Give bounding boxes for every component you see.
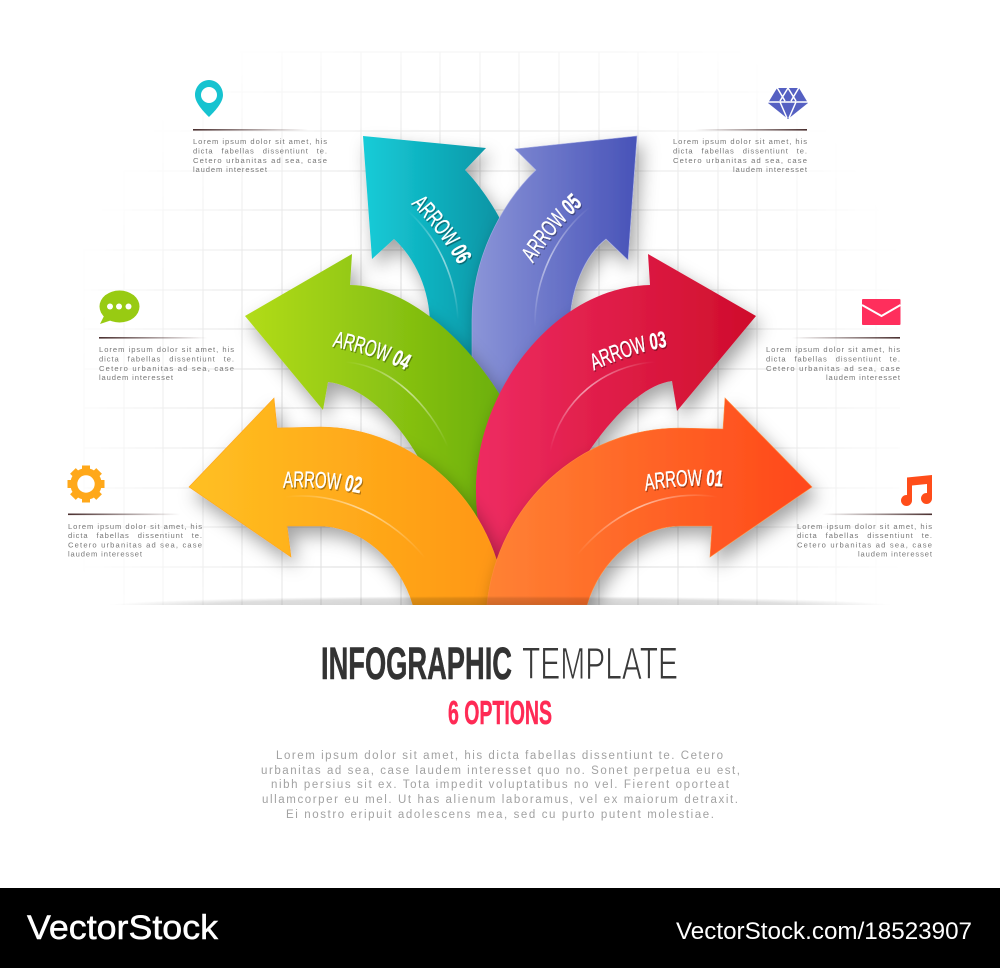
body text: nibh persius sit ex. Tota impedit voluptatibus no vel. Fierent oporteat [271, 779, 730, 791]
text block: bottom left: Lorem ipsum dolor sit amet, his [68, 522, 202, 531]
arrows fan [105, 136, 895, 616]
text block: bottom right: Cetero urbanitas ad sea, case [797, 540, 932, 550]
label: arrow 04: ARROW 04 [332, 332, 413, 371]
icon: diamond [766, 87, 810, 119]
body text: urbanitas ad sea, case laudem interesset quo no. Sonet perpetua eu est, [261, 765, 740, 777]
text block: top right: dicta fabellas dissentiunt te. [673, 146, 807, 156]
text block: top right [673, 129, 808, 174]
text block: middle left: Cetero urbanitas ad sea, case [99, 364, 234, 373]
text block: bottom left: laudem interesset [68, 550, 143, 558]
title: TEMPLATE [522, 638, 678, 689]
text block: bottom right: dicta fabellas dissentiunt te. [797, 531, 932, 540]
arrow 05 [472, 136, 637, 400]
icon: speech bubble [100, 290, 140, 324]
text block: middle right [766, 337, 901, 382]
arrow 03 [476, 254, 756, 600]
text block: top left: dicta fabellas dissentiunt te. [193, 146, 327, 156]
icon: envelope [862, 299, 900, 325]
text block: middle left: Lorem ipsum dolor sit amet, his [99, 345, 234, 354]
body text: ullamcorper eu mel. Ut has alienum laboramus, vel ex maiorum detraxit. [262, 794, 738, 806]
text block: bottom right: Lorem ipsum dolor sit amet, his [797, 522, 932, 531]
arrow 04 [244, 254, 504, 518]
text block: bottom right: laudem interesset [858, 550, 933, 558]
icon: gear [68, 466, 104, 502]
text block: top right: Lorem ipsum dolor sit amet, his [673, 137, 807, 146]
text block: middle right: Lorem ipsum dolor sit amet, his [766, 345, 900, 354]
text block: bottom left: Cetero urbanitas ad sea, case [68, 540, 202, 550]
text block: middle right: laudem interesset [826, 373, 901, 382]
text block: top left: laudem interesset [193, 165, 268, 174]
text block: bottom left [68, 514, 202, 558]
title: INFOGRAPHIC [321, 638, 512, 689]
text block: top right: Cetero urbanitas ad sea, case [673, 156, 807, 165]
body text [261, 750, 740, 821]
text block: middle left: laudem interesset [99, 373, 174, 382]
label: arrow 02: ARROW 02 [282, 471, 364, 495]
text block: middle right: Cetero urbanitas ad sea, case [766, 364, 900, 373]
body text: Lorem ipsum dolor sit amet, his dicta fabellas dissentiunt te. Cetero [276, 750, 723, 762]
text block: top left [193, 129, 327, 174]
text block: top left: Cetero urbanitas ad sea, case [193, 156, 327, 165]
text block: top right: laudem interesset [733, 165, 808, 174]
icon: music note [901, 475, 932, 506]
arrow 01 [487, 398, 812, 605]
subtitle: 6 OPTIONS [448, 694, 552, 731]
text block: middle left: dicta fabellas dissentiunt te. [99, 354, 234, 364]
footer url: VectorStock.com/18523907 [676, 918, 972, 945]
arrow labels [282, 192, 724, 495]
arrow 06 [358, 135, 506, 356]
body text: Ei nostro eripuit adolescens mea, sed cu purto putent molestiae. [286, 809, 714, 821]
label: arrow 06: ARROW 06 [410, 196, 472, 265]
arrow 02 [189, 398, 505, 605]
label: arrow 03: ARROW 03 [592, 331, 668, 372]
label: arrow 05: ARROW 05 [522, 192, 582, 265]
footer brand: VectorStock [27, 909, 219, 947]
text block: bottom right [797, 514, 933, 558]
label: arrow 01: ARROW 01 [645, 470, 724, 492]
text block: bottom left: dicta fabellas dissentiunt te. [68, 531, 202, 540]
text block: top left: Lorem ipsum dolor sit amet, his [193, 137, 327, 146]
text block: middle left [99, 337, 234, 382]
floor shadow [134, 596, 866, 605]
footer bar [0, 888, 1000, 968]
text block: middle right: dicta fabellas dissentiunt te. [766, 354, 900, 364]
icon: location pin [195, 80, 223, 117]
